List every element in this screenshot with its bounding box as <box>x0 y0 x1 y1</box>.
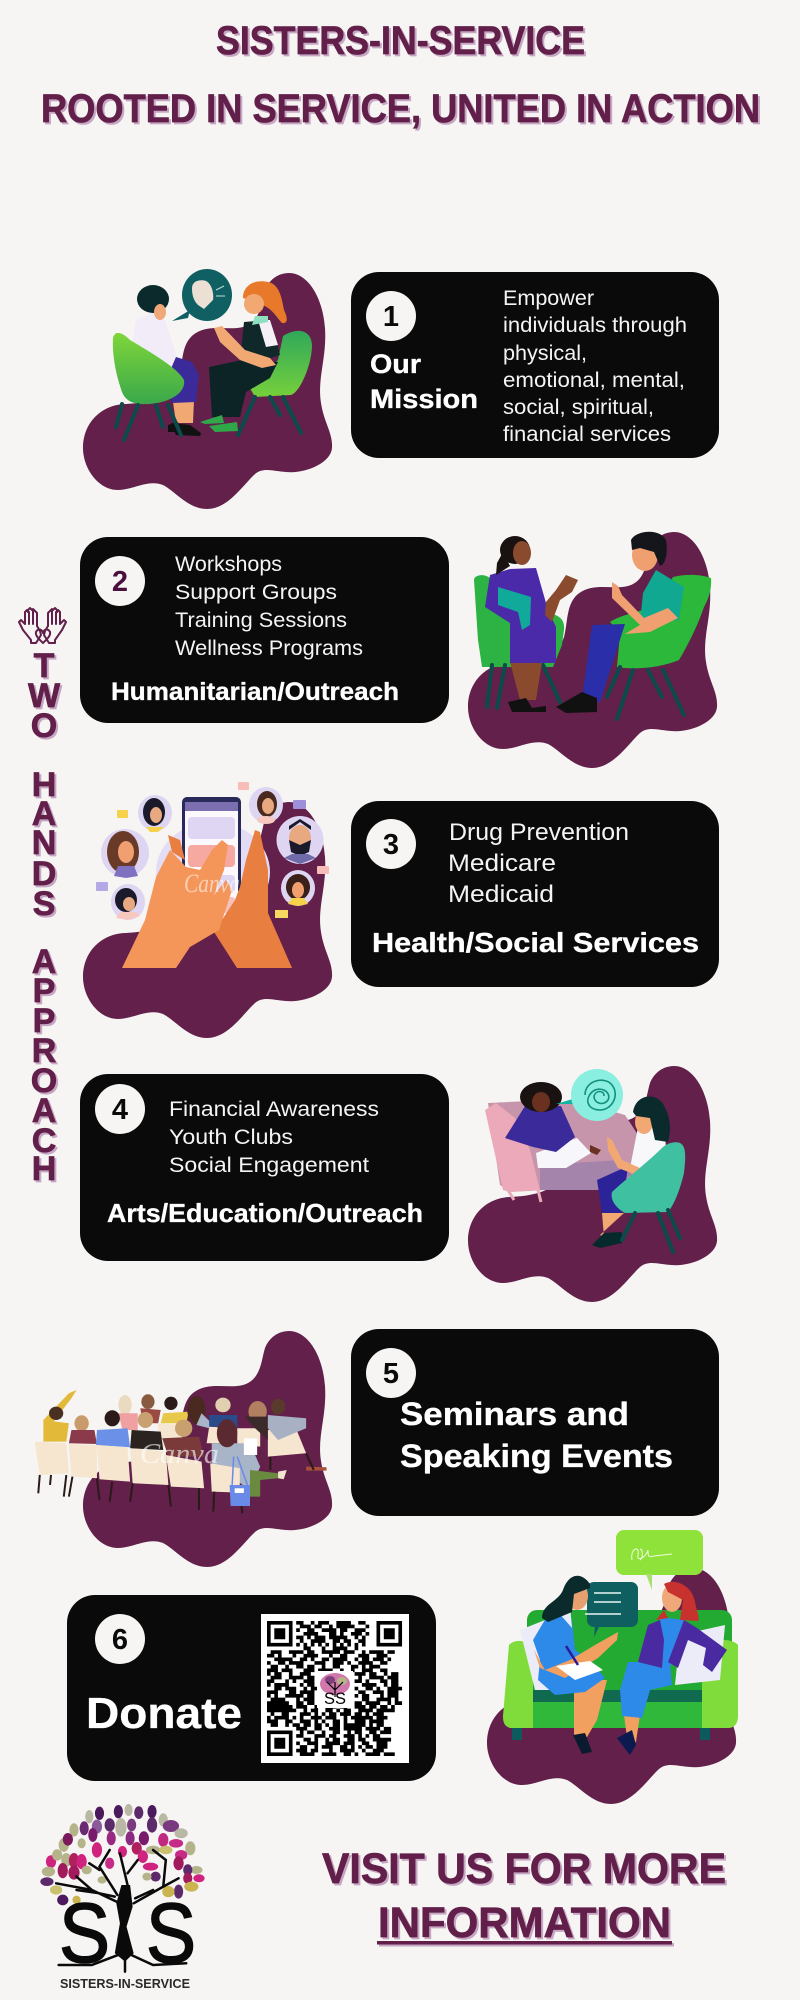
card body: Medicaid <box>448 881 554 908</box>
card heading: Arts/Education/Outreach <box>107 1198 423 1228</box>
card body: Youth Clubs <box>169 1126 293 1149</box>
blob <box>487 1568 736 1804</box>
blob <box>83 802 332 1038</box>
bubble: green <box>616 1530 703 1590</box>
illustration 2: woman and man talking <box>468 532 717 768</box>
card 3: health and social services <box>351 801 719 987</box>
leaves <box>40 1804 205 1905</box>
right woman on teal chair <box>592 1096 685 1252</box>
chat icons <box>96 782 329 918</box>
pink sofa <box>485 1101 638 1202</box>
card heading: Health/Social Services <box>372 927 699 958</box>
number badge 2: 2 <box>112 566 128 598</box>
card body <box>175 553 363 660</box>
QR centre logo <box>317 1671 353 1708</box>
card body: Social Engagement <box>169 1154 369 1177</box>
right man <box>556 532 711 719</box>
left chair legs <box>116 404 181 440</box>
icon: two hands with hearts <box>19 608 66 643</box>
illustration 4: counselling on a pink sofa <box>468 1066 717 1302</box>
card body <box>503 287 687 446</box>
thumb behind phone <box>168 835 185 860</box>
blob <box>83 1331 332 1567</box>
back row people <box>118 1394 306 1440</box>
cushions <box>520 1620 725 1690</box>
illustration 1: two women talking on green chairs <box>83 269 332 509</box>
card body <box>448 819 629 908</box>
left hand <box>122 840 232 968</box>
phone <box>182 797 241 926</box>
card body: Drug Prevention <box>449 819 629 846</box>
avatar right <box>276 816 324 864</box>
card body: Medicare <box>448 850 556 877</box>
title line 1: SISTERS-IN-SERVICE <box>216 19 585 63</box>
watermark: Canva <box>184 869 240 898</box>
card body: Training Sessions <box>175 609 347 632</box>
card heading <box>400 1396 673 1474</box>
letters S S: S <box>59 1886 110 1980</box>
back row chairs <box>158 1423 306 1457</box>
illustration 6: two women on a green sofa <box>487 1530 738 1804</box>
card body: emotional, mental, <box>503 369 685 392</box>
number badge 3: 3 <box>383 829 399 861</box>
seated woman in purple <box>505 1082 601 1168</box>
left woman <box>474 536 578 712</box>
closing call to action <box>322 1845 726 1947</box>
card heading: Speaking Events <box>400 1438 673 1474</box>
tree and figure silhouette <box>56 1850 186 1972</box>
left person <box>113 285 201 436</box>
speech bubble with head icon <box>172 269 232 321</box>
card body: Support Groups <box>175 581 337 604</box>
legs and feet <box>38 1453 327 1513</box>
foliage and branches, zoom coordinates <box>40 1804 205 1972</box>
illustration 5: audience seated in rows <box>35 1331 332 1567</box>
number badge 4 <box>95 1084 145 1134</box>
green sofa <box>503 1610 738 1740</box>
card 4: arts education outreach <box>80 1074 449 1261</box>
card body: Wellness Programs <box>175 637 363 660</box>
vertical text: TWO HANDS APPROACH <box>28 647 61 1188</box>
number badge 6: 6 <box>112 1624 128 1656</box>
avatar top <box>138 795 172 832</box>
card body: Workshops <box>175 553 282 576</box>
card body: Financial Awareness <box>169 1098 379 1121</box>
illustration 3: hands holding phone with social avatars <box>83 782 332 1038</box>
thought bubble <box>556 1069 623 1121</box>
bubble: teal <box>585 1582 638 1637</box>
blue tote bag <box>230 1457 250 1506</box>
front row chairs <box>35 1442 240 1493</box>
audience group drawn in zoom coordinates <box>35 1390 327 1513</box>
donate label: Donate <box>86 1689 242 1738</box>
card body: social, spiritual, <box>503 396 654 419</box>
number badge 6 <box>95 1614 145 1664</box>
logo caption: SISTERS-IN-SERVICE <box>60 1977 190 1991</box>
letters S S <box>59 1886 196 1980</box>
card 5: seminars and speaking events <box>351 1329 719 1516</box>
card heading: Humanitarian/Outreach <box>111 678 399 706</box>
card heading: Seminars and <box>400 1396 629 1432</box>
card heading: Our <box>370 349 422 379</box>
number badge 2 <box>95 556 145 606</box>
number badge 5 <box>366 1348 416 1398</box>
title <box>41 19 760 131</box>
vertical heading: two hands approach <box>19 608 66 1188</box>
number badge 1 <box>366 291 416 341</box>
card 1: our mission <box>351 272 719 458</box>
lavender halo <box>156 822 270 922</box>
avatar lower-left <box>111 884 145 920</box>
logo: sisters-in-service tree <box>40 1804 205 1991</box>
card body: financial services <box>503 423 671 446</box>
card heading: Mission <box>370 384 478 414</box>
card body: physical, <box>503 342 587 365</box>
blob <box>468 1066 717 1302</box>
front row people <box>43 1390 260 1490</box>
QR code <box>261 1614 409 1763</box>
blob <box>468 532 717 768</box>
right hand <box>214 830 292 968</box>
avatars <box>101 787 324 920</box>
number badge 5: 5 <box>383 1358 399 1390</box>
number badge 3 <box>366 819 416 869</box>
QR centre logo: SS <box>324 1689 346 1708</box>
card 6: donate with QR code <box>67 1595 436 1781</box>
avatar top-right <box>249 787 283 824</box>
right woman <box>617 1582 727 1755</box>
avatar lower-right <box>281 870 315 906</box>
number badge 4: 4 <box>112 1094 128 1126</box>
card heading <box>370 349 478 414</box>
blob <box>83 273 332 509</box>
right person <box>200 281 312 435</box>
line 1: VISIT US FOR MORE <box>322 1845 726 1893</box>
card 2: humanitarian outreach <box>80 537 449 723</box>
watermark: Canva <box>140 1439 219 1470</box>
line 2 underlined: INFORMATION <box>378 1899 671 1947</box>
card body: individuals through <box>503 314 687 337</box>
letters S S: S <box>146 1886 196 1980</box>
card body <box>169 1098 379 1177</box>
card body: Empower <box>503 287 594 310</box>
avatar left <box>101 829 149 878</box>
number badge 1: 1 <box>383 301 399 333</box>
left woman <box>533 1576 618 1754</box>
